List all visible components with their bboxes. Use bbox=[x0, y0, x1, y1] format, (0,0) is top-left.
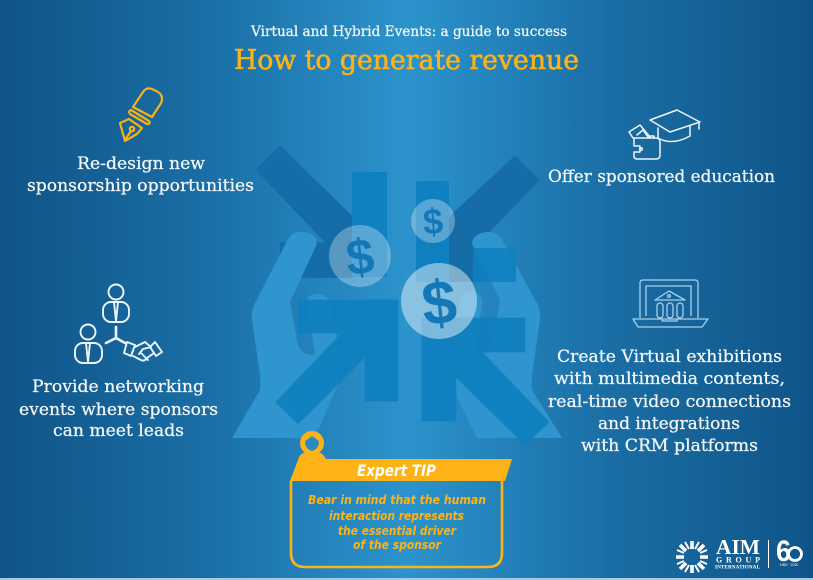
tip text: Bear in mind that the human bbox=[308, 492, 486, 507]
coin: large bbox=[401, 263, 477, 340]
subtitle: Virtual and Hybrid Events: a guide to success bbox=[250, 24, 567, 40]
left hand bbox=[232, 232, 343, 438]
logo: 60th anniversary: 1960 · 2020 bbox=[780, 563, 798, 567]
tip text: the essential driver bbox=[338, 523, 457, 538]
logo: 60th anniversary bbox=[776, 535, 802, 568]
coin: top: $ bbox=[422, 200, 444, 243]
callout: expert tip bbox=[290, 431, 512, 567]
icon: expert avatar bbox=[290, 431, 512, 481]
text: networking events bbox=[19, 377, 218, 440]
arrow: bottom left bbox=[276, 300, 398, 424]
text: re-design sponsorship: sponsorship opportunities bbox=[27, 176, 254, 195]
tip text: interaction represents bbox=[329, 508, 464, 523]
text: virtual exhibitions: with multimedia contents, bbox=[554, 369, 785, 388]
tip text bbox=[308, 492, 486, 552]
icon: graduation cap and wallet bbox=[629, 110, 700, 159]
text: networking events: events where sponsors bbox=[19, 400, 218, 419]
logo: AIM Group International: INTERNATIONAL bbox=[715, 566, 761, 570]
logo mark bbox=[676, 541, 708, 573]
bottom edge bbox=[0, 578, 813, 580]
text: virtual exhibitions: real-time video connections bbox=[548, 392, 791, 411]
text: networking events: can meet leads bbox=[53, 421, 184, 440]
text: virtual exhibitions: and integrations bbox=[598, 414, 740, 433]
logo: 60th anniversary: 6 bbox=[776, 535, 791, 568]
icon: fountain pen bbox=[120, 88, 162, 141]
title: How to generate revenue bbox=[234, 45, 579, 76]
central illustration: hands, arrows and coins bbox=[232, 147, 562, 445]
coin: left: $ bbox=[343, 228, 377, 286]
text: re-design sponsorship: Re-design new bbox=[77, 154, 205, 173]
coin: left bbox=[329, 225, 391, 287]
logo: AIM Group International: AIM bbox=[716, 535, 760, 559]
logo: AIM Group International: GROUP bbox=[716, 556, 760, 564]
arrow: top right diagonal bbox=[416, 157, 538, 282]
tip box bbox=[291, 481, 502, 567]
text: re-design sponsorship bbox=[27, 154, 254, 195]
arrow: top right horizontal bar bbox=[473, 248, 516, 282]
text: virtual exhibitions: with CRM platforms bbox=[581, 436, 758, 455]
icon: laptop with virtual exhibition bbox=[633, 280, 708, 327]
coin: top bbox=[411, 199, 455, 243]
tip text: of the sponsor bbox=[353, 537, 442, 552]
text: virtual exhibitions: Create Virtual exhibitions bbox=[557, 347, 782, 366]
coin: large: $ bbox=[419, 267, 460, 340]
icon: networking people and handshake bbox=[75, 284, 162, 363]
arrow: bottom right bbox=[422, 318, 549, 445]
text: networking events: Provide networking bbox=[32, 377, 204, 396]
arrow: top left bbox=[257, 147, 387, 277]
right hand bbox=[445, 232, 562, 438]
logo: AIM Group International bbox=[676, 535, 802, 573]
text: sponsored education: Offer sponsored education bbox=[548, 167, 775, 186]
tip heading: Expert TIP bbox=[357, 461, 436, 480]
text: virtual exhibitions bbox=[548, 347, 791, 455]
